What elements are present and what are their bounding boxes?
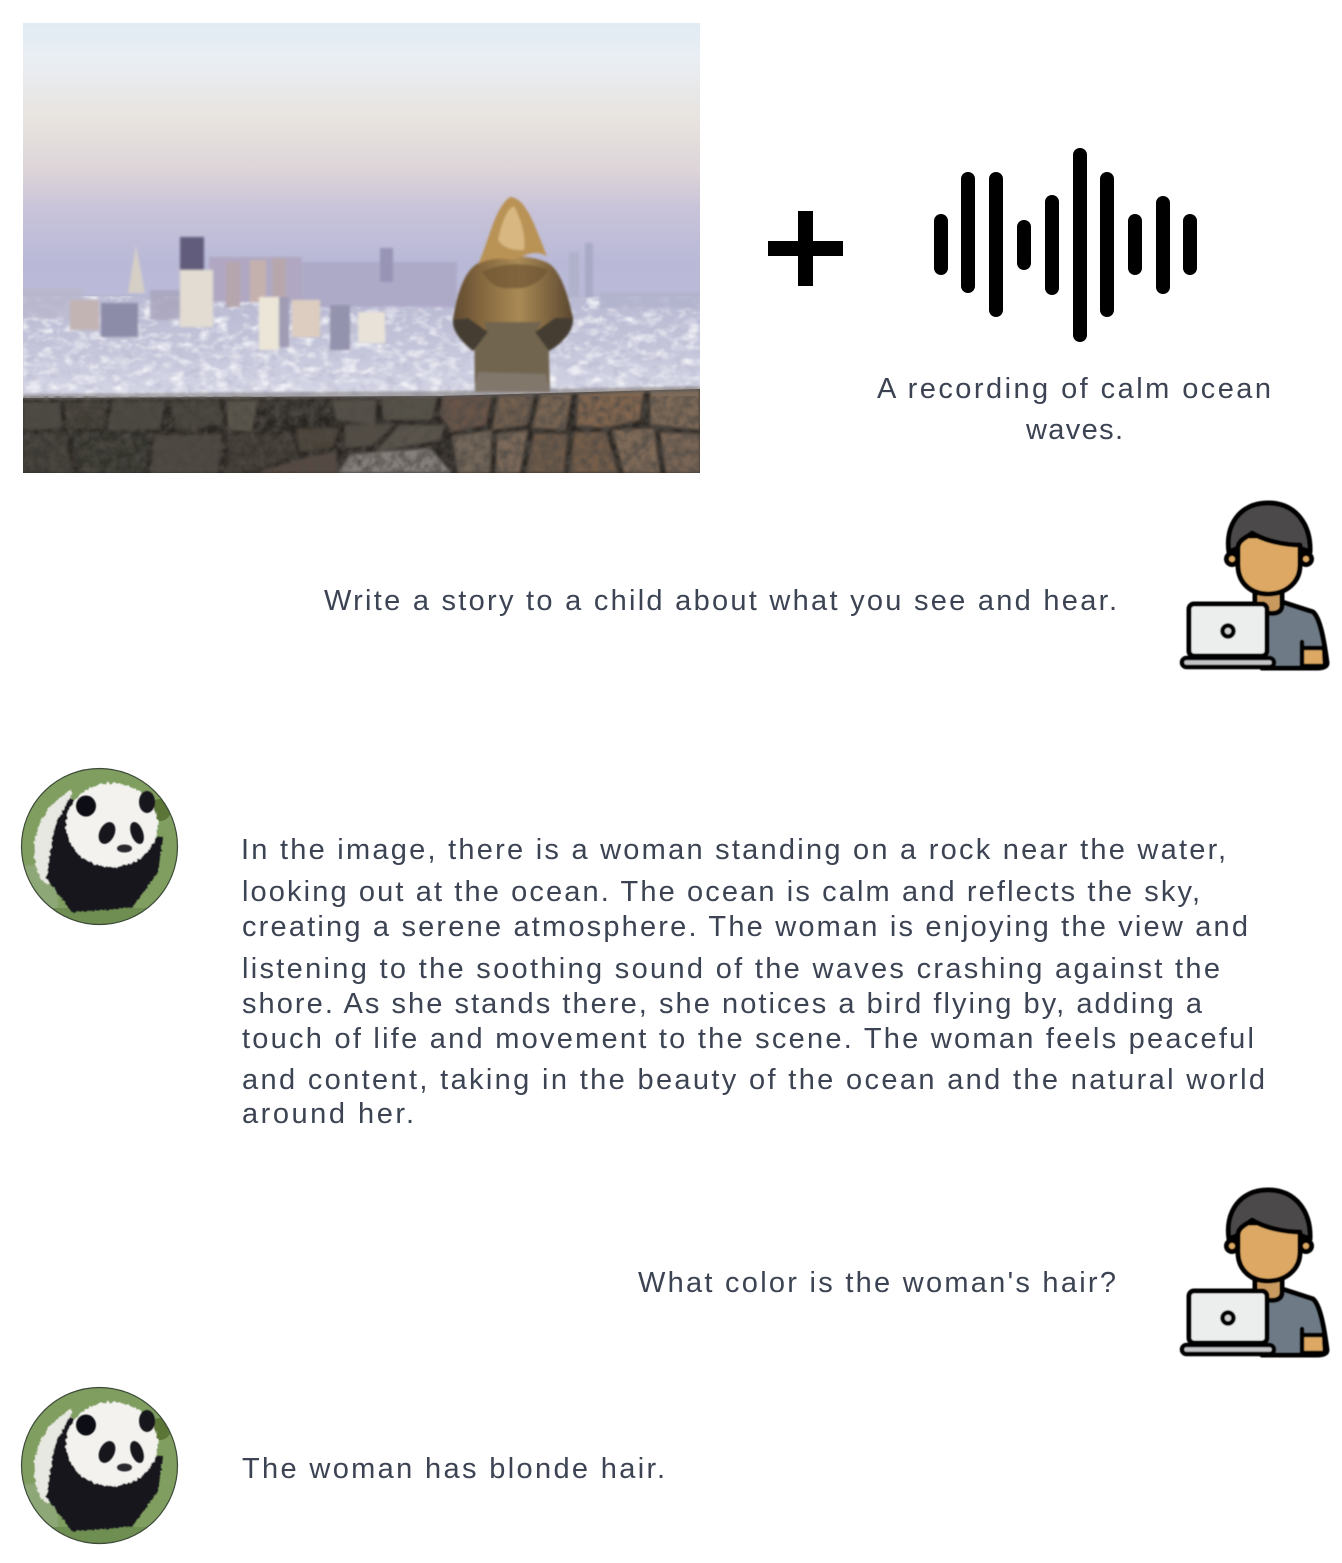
photo: woman overlooking a hazy city: [23, 23, 700, 473]
audio caption: A recording of calm ocean: [877, 373, 1271, 405]
assistant answer: story: around her.: [242, 1098, 414, 1130]
assistant answer: hair colour: The woman has blonde hair.: [242, 1453, 665, 1485]
avatar: panda (second): [20, 1388, 180, 1544]
assistant answer: story: shore. As she stands there, she notices a bird flying by, adding a: [242, 988, 1203, 1020]
woman seen from behind: [453, 197, 573, 392]
assistant answer: story: touch of life and movement to the scene. The woman feels peaceful: [242, 1023, 1254, 1055]
avatar: panda: [20, 768, 180, 925]
plus sign: [768, 211, 843, 286]
stone wall: [23, 386, 700, 473]
assistant answer: story: looking out at the ocean. The ocean is calm and reflects the sky,: [242, 876, 1200, 908]
assistant answer: story: In the image, there is a woman standing on a rock near the water,: [241, 834, 1226, 866]
assistant answer: story: and content, taking in the beauty of the ocean and the natural world: [242, 1064, 1265, 1096]
icon: user at laptop (second): [1182, 1190, 1327, 1355]
assistant answer: story: creating a serene atmosphere. The woman is enjoying the view and: [242, 911, 1248, 943]
user prompt: story request: Write a story to a child about what you see and hear.: [324, 585, 1117, 617]
icon: audio waveform: [934, 148, 1197, 342]
audio caption: waves.: [1025, 414, 1123, 446]
user prompt: hair colour question: What color is the woman's hair?: [638, 1267, 1116, 1299]
icon: user at laptop: [1182, 503, 1327, 668]
assistant answer: story: listening to the soothing sound of the waves crashing against the: [242, 953, 1220, 985]
audio caption: [877, 373, 1271, 446]
assistant answer: story: [241, 834, 1265, 1130]
